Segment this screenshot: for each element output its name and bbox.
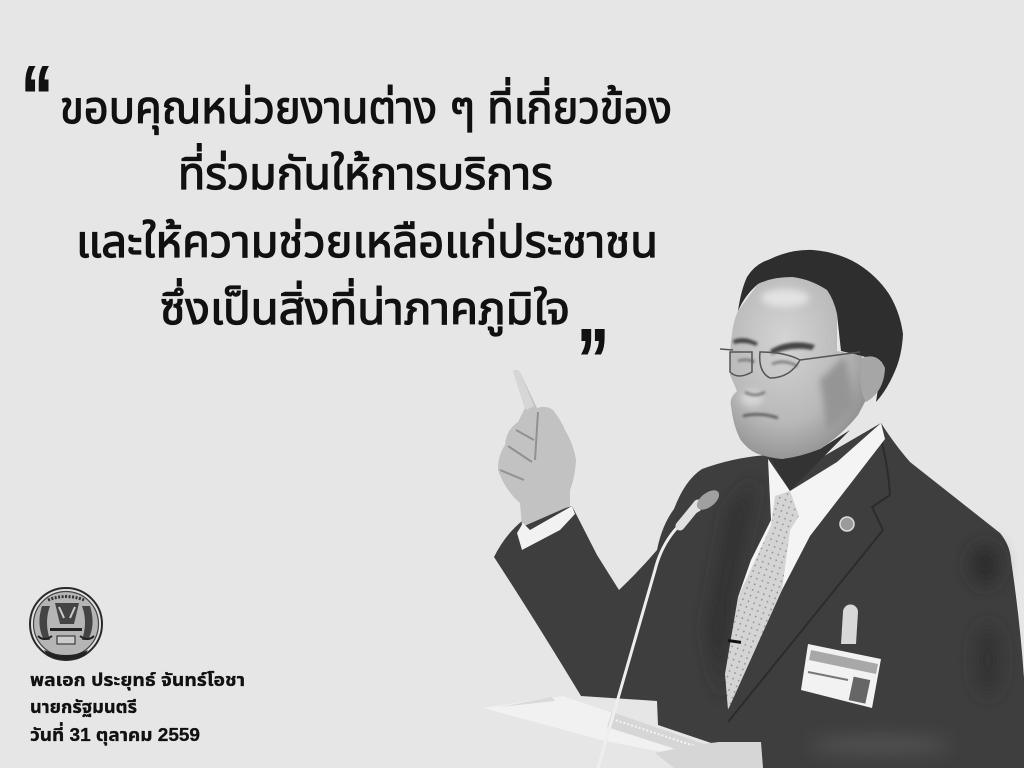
date: วันที่ 31 ตุลาคม 2559 bbox=[30, 722, 200, 746]
name: พลเอก ประยุทธ์ จันทร์โอชา bbox=[30, 670, 245, 691]
notebook spiral bbox=[607, 712, 724, 757]
quote text bbox=[21, 49, 672, 408]
ID badge bbox=[801, 605, 881, 708]
raised hand bbox=[498, 370, 576, 527]
quote line 4: ซึ่งเป็นสิ่งที่น่าภาคภูมิใจ bbox=[160, 278, 570, 336]
glasses bbox=[720, 349, 860, 378]
quote line 2: ที่ร่วมกันให้การบริการ bbox=[178, 143, 553, 199]
shirt cuff bbox=[517, 506, 575, 550]
suit jacket bbox=[494, 423, 1024, 768]
lower hand bbox=[655, 742, 763, 768]
position: นายกรัฐมนตรี bbox=[30, 697, 137, 717]
microphone head bbox=[680, 486, 723, 526]
eyebrows, eyes and mouth bbox=[733, 338, 815, 418]
microphone pole bbox=[598, 509, 700, 768]
attribution bbox=[30, 670, 245, 746]
suit shading bbox=[708, 480, 1000, 753]
tie bbox=[725, 491, 799, 710]
face bbox=[730, 277, 866, 459]
shirt bbox=[738, 423, 885, 650]
quote line 1: ขอบคุณหน่วยงานต่าง ๆ ที่เกี่ยวข้อง bbox=[60, 77, 672, 135]
ear bbox=[861, 356, 885, 402]
closing quotation mark: ” bbox=[577, 312, 609, 408]
lapel pin bbox=[840, 517, 854, 531]
lapel line bbox=[728, 439, 890, 722]
neck shadow bbox=[768, 430, 850, 491]
paper on lectern bbox=[483, 696, 726, 757]
seal of the prime minister's office bbox=[30, 588, 102, 660]
hair bbox=[738, 250, 903, 402]
pen bbox=[728, 639, 741, 644]
quote line 3: และให้ความช่วยเหลือแก่ประชาชน bbox=[76, 216, 658, 267]
opening quotation mark: “ bbox=[21, 49, 53, 145]
face shading bbox=[741, 289, 855, 432]
photo: prime minister at the microphone bbox=[483, 250, 1024, 768]
